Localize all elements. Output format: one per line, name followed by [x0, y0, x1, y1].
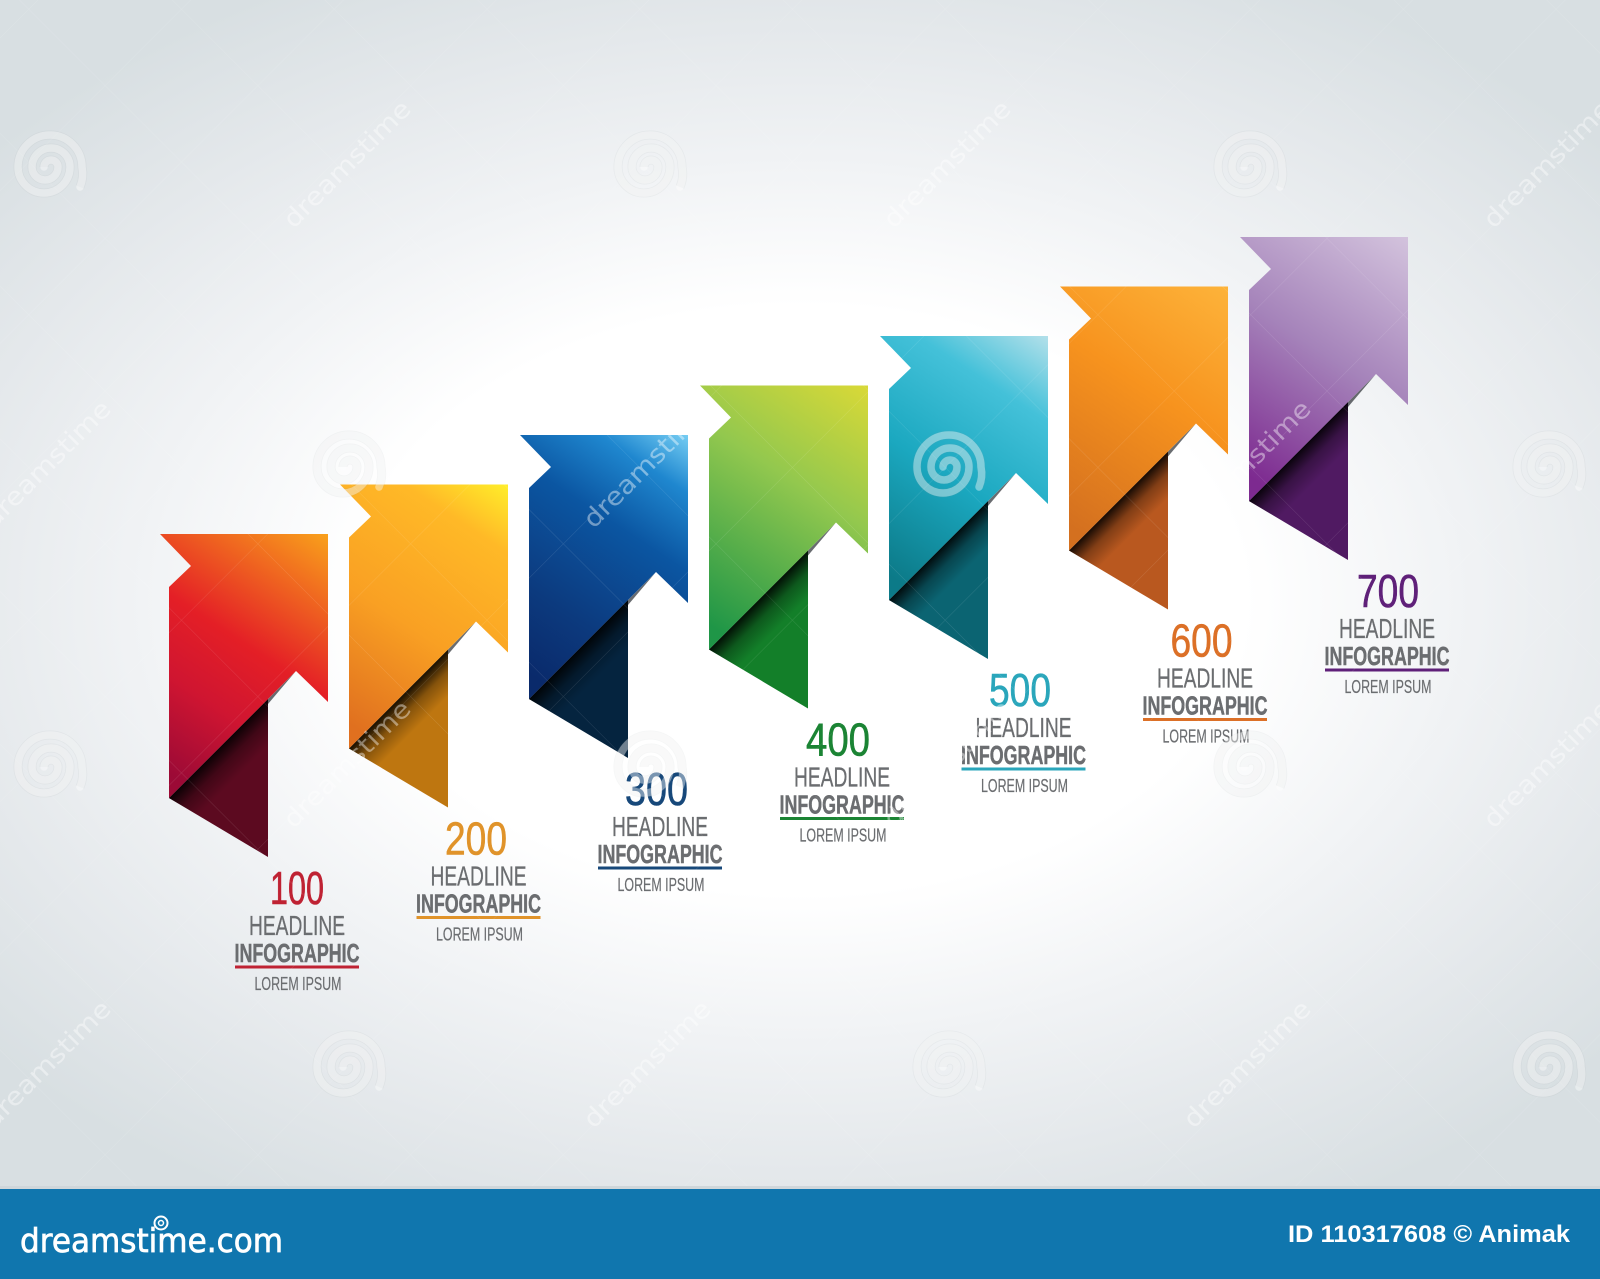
- arrow 600: [1060, 286, 1228, 610]
- step 300: [520, 435, 723, 895]
- arrow 200: [340, 484, 508, 808]
- step 600: [1060, 286, 1268, 746]
- label 400: INFOGRAPHIC: [780, 790, 905, 820]
- watermark text: dreamstime: [877, 694, 1017, 834]
- label 500: LOREM IPSUM: [981, 776, 1068, 796]
- label 100: HEADLINE: [249, 910, 345, 941]
- label 700: 700: [1357, 565, 1419, 617]
- arrow 700: [1240, 237, 1408, 560]
- label 200: 200: [445, 812, 507, 864]
- watermark text: dreamstime: [1177, 394, 1317, 534]
- step 100: [160, 534, 360, 994]
- label 700: [1324, 565, 1450, 697]
- label 400: [780, 714, 905, 846]
- label 300: HEADLINE: [612, 811, 708, 842]
- label 300: 300: [625, 763, 688, 815]
- label 200: INFOGRAPHIC: [416, 888, 541, 918]
- label 100: INFOGRAPHIC: [234, 938, 360, 968]
- watermark text: dreamstime: [277, 94, 417, 234]
- label 200: [416, 812, 541, 944]
- label 600: 600: [1170, 614, 1232, 666]
- step 200: [340, 484, 541, 944]
- label 400: HEADLINE: [794, 762, 890, 792]
- arrow 300: [520, 435, 688, 758]
- label 400: LOREM IPSUM: [800, 826, 886, 846]
- watermark text: dreamstime: [577, 994, 717, 1134]
- label 200: HEADLINE: [430, 860, 526, 892]
- label 600: LOREM IPSUM: [1162, 726, 1250, 746]
- watermark text: dreamstime: [577, 394, 717, 534]
- label 100: [234, 862, 360, 994]
- label 600: INFOGRAPHIC: [1142, 690, 1268, 720]
- label 100: LOREM IPSUM: [254, 974, 342, 994]
- footer logo: dreamstime.com: [20, 1221, 283, 1260]
- label 300: LOREM IPSUM: [618, 875, 704, 895]
- label 500: HEADLINE: [976, 712, 1072, 743]
- label 700: INFOGRAPHIC: [1324, 641, 1450, 671]
- watermark text: dreamstime: [877, 94, 1017, 234]
- label 500: INFOGRAPHIC: [961, 740, 1086, 770]
- footer image id: ID 110317608 © Animak: [1288, 1221, 1571, 1248]
- label 600: HEADLINE: [1157, 662, 1253, 694]
- step 500: [880, 336, 1086, 796]
- footer bar: [0, 1186, 1600, 1279]
- label 500: [961, 664, 1086, 796]
- watermark text: dreamstime: [277, 694, 417, 834]
- label 100: 100: [270, 862, 324, 914]
- step 400: [700, 386, 905, 846]
- label 700: LOREM IPSUM: [1344, 677, 1432, 697]
- arrow 500: [880, 336, 1048, 659]
- label 500: 500: [989, 664, 1051, 716]
- watermark text: dreamstime: [1177, 994, 1317, 1134]
- label 700: HEADLINE: [1339, 613, 1435, 644]
- arrow 400: [700, 386, 868, 708]
- watermark spirals: [18, 135, 1582, 1093]
- arrow 100: [160, 534, 328, 857]
- label 300: INFOGRAPHIC: [598, 839, 723, 869]
- label 200: LOREM IPSUM: [436, 924, 523, 944]
- label 600: [1142, 614, 1268, 746]
- label 400: 400: [806, 714, 870, 766]
- label 300: [598, 763, 723, 895]
- step 700: [1240, 237, 1450, 697]
